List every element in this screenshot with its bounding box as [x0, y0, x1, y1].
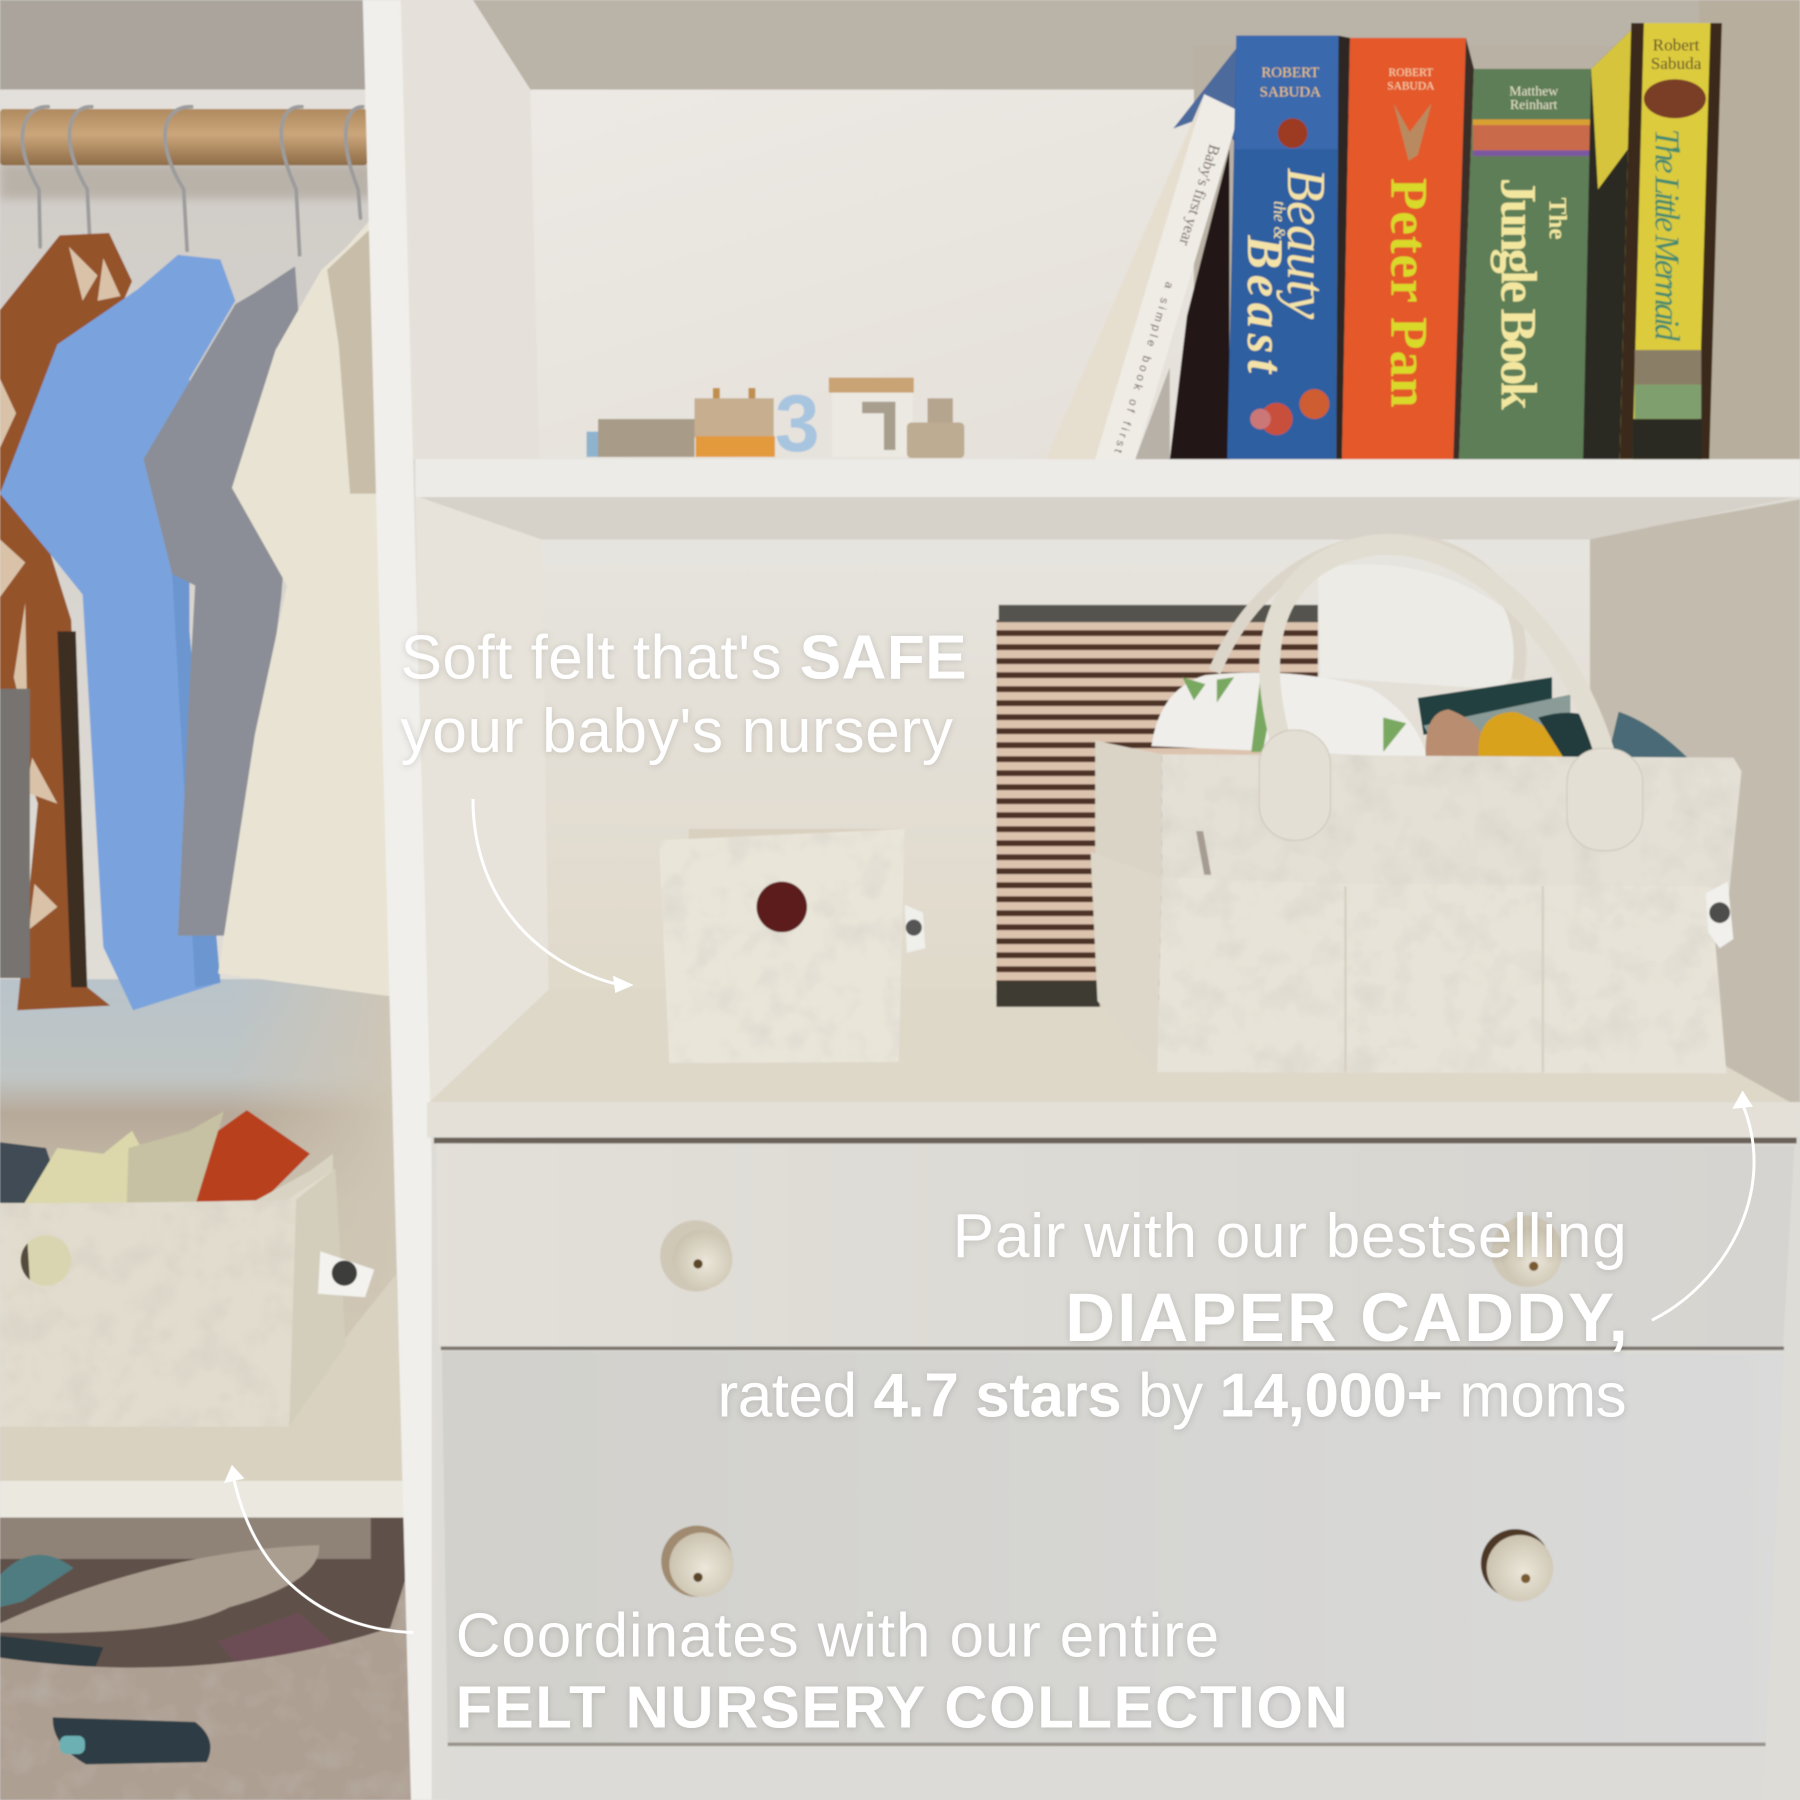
book: The Little Mermaid: The Little Mermaid	[1647, 129, 1685, 342]
book: The Jungle Book	[1459, 69, 1591, 459]
book: Beauty and the Beast: SABUDA	[1260, 84, 1321, 100]
book: The Little Mermaid	[1583, 23, 1722, 459]
callout: diaper caddy	[717, 1202, 1628, 1431]
drawer 1	[436, 1143, 1794, 1350]
handle tabs	[1259, 730, 1330, 840]
dresser	[427, 1102, 1800, 1800]
back wall	[530, 90, 1724, 463]
middle compartment	[416, 496, 1800, 1108]
ceiling	[459, 0, 1800, 92]
cream shirt	[218, 220, 391, 996]
book: The Jungle Book: The	[1544, 197, 1572, 240]
text: rating: rated 4.7 stars by 14,000+ moms	[717, 1362, 1627, 1431]
book: Beauty and the Beast: Beast	[1237, 234, 1293, 375]
text: baby's nursery: your baby's nursery	[401, 697, 953, 766]
knobs	[660, 1216, 1562, 1601]
gap	[1336, 36, 1350, 459]
dark book	[1170, 149, 1229, 459]
callout: felt nursery collection	[456, 1602, 1348, 1741]
arrow: to small bin	[473, 799, 634, 993]
grey shirt	[143, 266, 301, 936]
lower cubby contents	[0, 1518, 411, 1800]
laundry in basket	[0, 1110, 333, 1217]
small felt bin	[659, 829, 925, 1063]
books	[1046, 23, 1722, 459]
upper compartment	[390, 0, 1800, 463]
drawer 2	[442, 1351, 1784, 1745]
closet: hanging rod and clothes	[0, 0, 391, 1010]
text: coordinates: Coordinates with our entire	[456, 1602, 1219, 1671]
brown floral shirt	[0, 233, 132, 1010]
arrow: to caddy	[1652, 1091, 1754, 1320]
book: The Little Mermaid: Sabuda	[1651, 54, 1702, 73]
right wall	[1699, 0, 1800, 459]
hangers	[22, 107, 363, 255]
left inner wall	[390, 0, 540, 459]
book: Peter Pan	[1342, 38, 1466, 459]
book: Baby's first year: a simple book of first	[1111, 280, 1175, 455]
knob lower left	[661, 1526, 734, 1597]
book: Baby's first year	[1046, 94, 1240, 459]
vertical panel	[363, 0, 449, 1800]
tag	[1706, 882, 1733, 948]
text: pair with: Pair with our bestselling	[953, 1202, 1627, 1271]
text: diaper caddy: DIAPER CADDY,	[1065, 1279, 1628, 1356]
arrow: to bins	[224, 1465, 413, 1632]
blue shirt shade	[172, 574, 220, 987]
number block 3: 3	[775, 379, 820, 469]
shelf board	[416, 459, 1800, 497]
folded items	[1418, 677, 1690, 762]
pocket side	[1091, 852, 1162, 1072]
lower shelf	[0, 1274, 404, 1483]
text: soft felt: Soft felt that's SAFE	[401, 623, 967, 692]
caddy side panel	[1095, 740, 1162, 884]
book: Beauty and the Beast: Beauty	[1276, 168, 1337, 320]
book: The Jungle Book: Jungle Book	[1491, 178, 1547, 411]
striped changing pad	[996, 605, 1318, 1007]
book: Beauty and the Beast: ROBERT	[1261, 65, 1319, 81]
drawer 3	[450, 1746, 1764, 1800]
book: Beauty and the Beast	[1227, 36, 1339, 459]
front pocket	[1157, 877, 1727, 1073]
gap	[1453, 38, 1474, 459]
book: The Jungle Book: Reinhart	[1510, 97, 1558, 112]
grey wedge	[1135, 367, 1170, 459]
book: Peter Pan: SABUDA	[1387, 81, 1435, 93]
book: Beauty and the Beast: the &	[1270, 201, 1289, 240]
toy train	[587, 378, 964, 469]
diaper caddy	[1091, 540, 1741, 1073]
callout: safe felt	[401, 623, 967, 766]
soft cloth behind handle	[1318, 564, 1519, 689]
blue book rear cover	[1173, 48, 1236, 143]
book: The Jungle Book: Matthew	[1509, 83, 1558, 98]
blue shirt	[0, 255, 235, 1010]
felt bin with tag	[0, 1169, 374, 1427]
text: collection: FELT NURSERY COLLECTION	[456, 1674, 1348, 1741]
diapers	[1151, 672, 1427, 758]
pen	[1196, 831, 1211, 875]
book: The Little Mermaid: Robert	[1653, 36, 1700, 55]
knob lower right	[1481, 1529, 1553, 1601]
book: Peter Pan: ROBERT	[1389, 67, 1433, 79]
wooden rod	[0, 109, 367, 165]
knob top left	[660, 1220, 732, 1291]
knob top right	[1491, 1216, 1562, 1287]
back handle	[1215, 540, 1520, 680]
caddy back panel	[1162, 754, 1741, 895]
felt basket	[0, 1561, 411, 1800]
book: Peter Pan: Peter Pan	[1379, 178, 1437, 408]
front handle	[1270, 544, 1609, 781]
book: Baby's first year: Baby's first year	[1175, 142, 1222, 248]
lower left cubby	[0, 976, 411, 1800]
